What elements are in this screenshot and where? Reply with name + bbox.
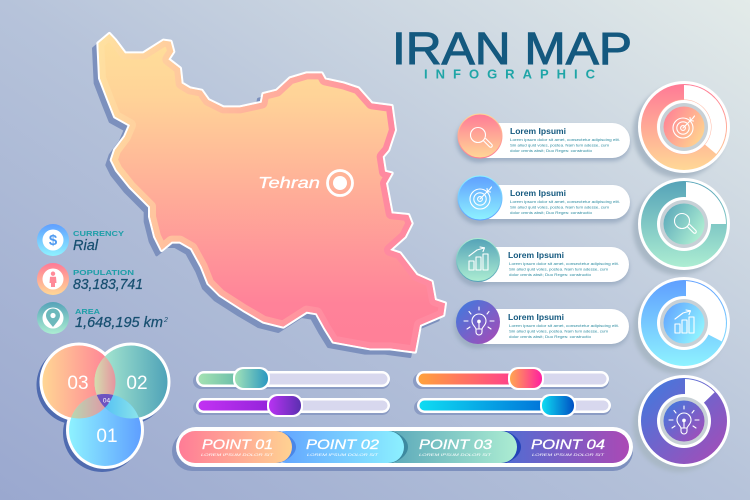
card 3: Lorem Ipsumi	[508, 250, 564, 260]
card 3: Lorem ipsum dolor sit amet, consectetur adipiscing elit.	[509, 261, 619, 266]
stat: currency: Rial	[73, 238, 99, 254]
point 02: POINT 02	[306, 437, 380, 452]
slider 2	[193, 394, 390, 417]
point 01: POINT 01	[202, 437, 273, 452]
card 1: Lorem ipsum dolor sit amet, consectetur adipiscing elit.	[510, 137, 620, 142]
card 2: Lorem Ipsumi	[510, 188, 566, 198]
card 1: Sin aliud quid voles, postea. Nam tum adesse, cum	[510, 142, 610, 148]
Tehran marker	[258, 170, 352, 196]
stat: area	[37, 302, 168, 334]
point 02	[270, 431, 404, 463]
card 4: Lorem Ipsumi	[508, 312, 564, 322]
Tehran marker: Tehran	[258, 175, 320, 192]
stat: currency	[37, 224, 124, 256]
card 1: Lorem Ipsumi	[510, 126, 566, 136]
point 01: LOREM IPSUM DOLOR SIT	[201, 452, 274, 457]
card 4: dolor omnis absit; Duo Reges: constructio	[509, 334, 592, 339]
card 3: Sin aliud quid voles, postea. Nam tum adesse, cum	[509, 266, 609, 272]
donut 3	[633, 277, 730, 374]
stat: currency: $	[49, 232, 58, 249]
point 03: LOREM IPSUM DOLOR SIT	[419, 452, 492, 457]
stat: area: AREA	[75, 307, 101, 316]
point 01	[179, 431, 292, 463]
slider 1	[193, 367, 390, 390]
donut 1	[633, 81, 730, 178]
point 03: POINT 03	[419, 437, 493, 452]
title: INFOGRAPHIC	[424, 66, 596, 82]
card 2: dolor omnis absit; Duo Reges: constructio	[510, 210, 593, 215]
slider 3	[413, 367, 609, 390]
stat: currency: CURRENCY	[73, 229, 124, 238]
title: IRAN MAP	[392, 23, 632, 74]
stat: area: 1,648,195 km	[75, 315, 163, 331]
card 2: Lorem ipsum dolor sit amet, consectetur adipiscing elit.	[510, 199, 620, 204]
donut 4	[633, 375, 730, 472]
card 4	[454, 300, 629, 348]
stat: population: 83,183,741	[73, 277, 143, 293]
donut 2	[633, 178, 730, 275]
stat: area: 2	[163, 317, 168, 324]
point 04: LOREM IPSUM DOLOR SIT	[532, 452, 605, 457]
card 4: Sin aliud quid voles, postea. Nam tum adesse, cum	[509, 328, 609, 334]
stat: population	[37, 263, 143, 295]
point 03	[380, 431, 517, 463]
card 2	[456, 176, 630, 224]
card 2: Sin aliud quid voles, postea. Nam tum adesse, cum	[510, 204, 610, 210]
map of Iran	[93, 34, 445, 357]
points bar	[172, 427, 633, 471]
card 4: Lorem ipsum dolor sit amet, consectetur adipiscing elit.	[509, 323, 619, 328]
venn diagram: 02	[126, 373, 148, 394]
slider 4	[414, 394, 611, 417]
venn diagram: 03	[67, 373, 89, 394]
card 1: dolor omnis absit; Duo Reges: constructio	[510, 148, 593, 153]
card 3: dolor omnis absit; Duo Reges: constructio	[509, 272, 592, 277]
point 04: POINT 04	[531, 437, 605, 452]
stat: population: POPULATION	[73, 268, 134, 277]
point 02: LOREM IPSUM DOLOR SIT	[307, 452, 379, 457]
card 3	[454, 238, 629, 286]
venn diagram: 04	[103, 398, 110, 404]
venn diagram: 01	[96, 426, 118, 447]
point 04	[480, 431, 629, 463]
venn diagram	[36, 342, 170, 472]
card 1	[456, 114, 630, 162]
